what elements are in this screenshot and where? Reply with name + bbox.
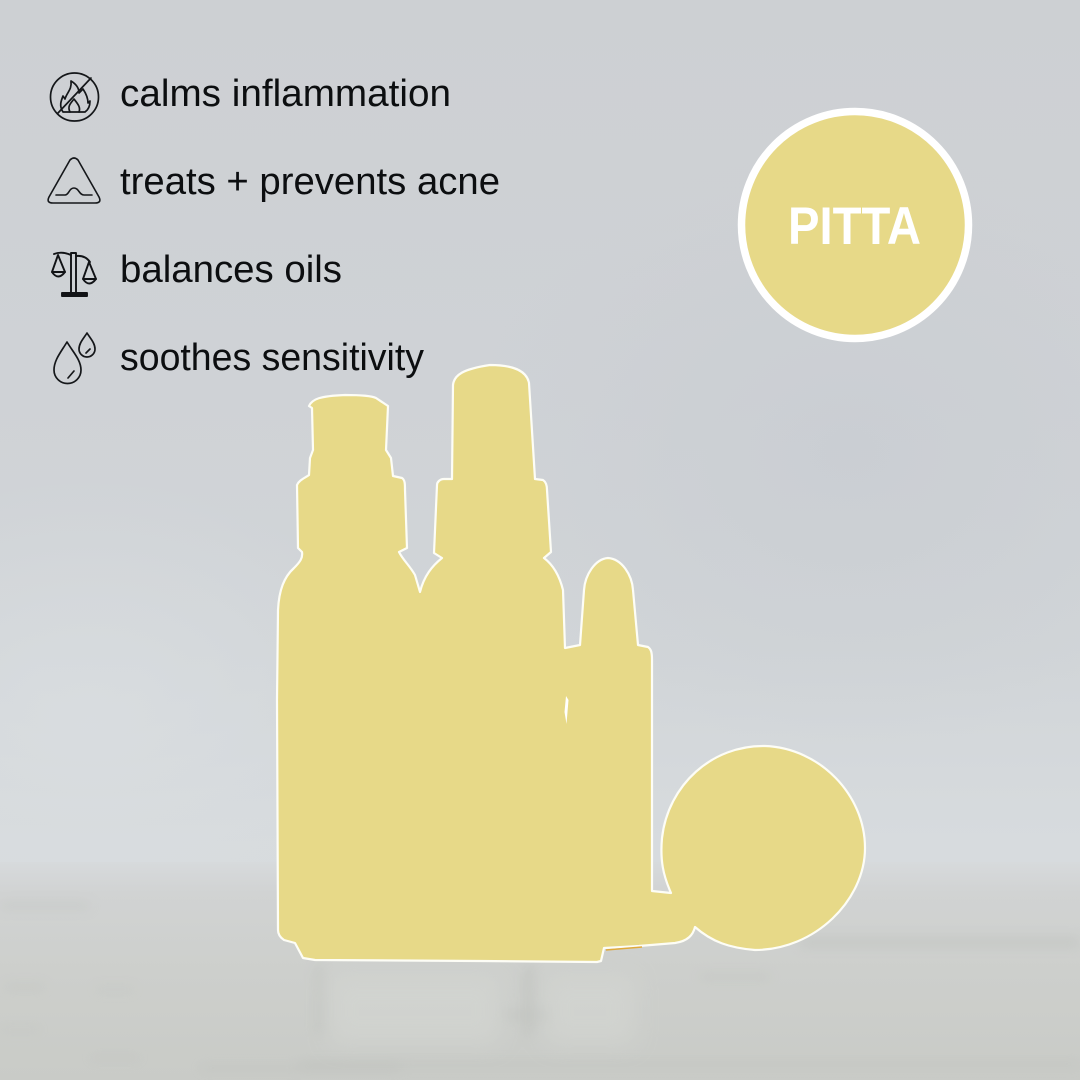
- icon: nose with blemish: [48, 158, 100, 203]
- badge: Pitta: [742, 112, 968, 338]
- gap between bottles: [564, 696, 568, 724]
- text: treats + prevents acne: treats + prevents acne: [120, 161, 500, 203]
- benefit: calms inflammation: [50, 73, 451, 121]
- product silhouette: bottles and jar: [277, 365, 865, 962]
- benefit: treats and prevents acne: [48, 158, 500, 203]
- text: soothes sensitivity: soothes sensitivity: [120, 337, 424, 379]
- benefit: balances oils: [52, 249, 342, 296]
- badge label: PITTA: [788, 197, 921, 256]
- icon: balance scale: [52, 253, 96, 296]
- text: calms inflammation: calms inflammation: [120, 73, 451, 115]
- icon: water drops: [54, 333, 95, 384]
- bottle shadow glint: [606, 947, 642, 950]
- icon: crossed-out flame: [50, 73, 98, 121]
- benefit: soothes sensitivity: [54, 333, 424, 384]
- text: balances oils: balances oils: [120, 249, 342, 291]
- benefits list: [48, 73, 500, 384]
